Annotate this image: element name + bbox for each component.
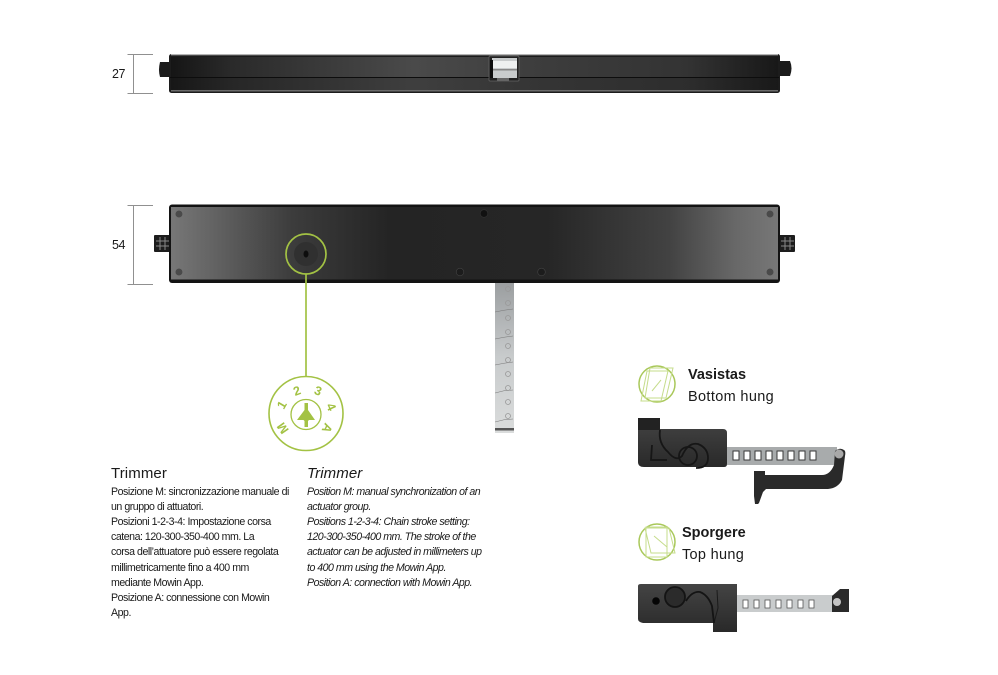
bracket arm	[754, 449, 845, 504]
english body: 120-300-350-400 mm. The stroke of the	[307, 531, 476, 543]
trimmer position dial: 2	[291, 383, 303, 399]
actuator body	[169, 54, 780, 93]
chain bracket	[489, 56, 519, 81]
dimension label 27: 27	[112, 67, 125, 81]
italian body: App.	[111, 607, 131, 619]
italian body: millimetricamente fino a 400 mm	[111, 562, 249, 574]
actuator body	[169, 204, 780, 283]
english heading: Trimmer	[307, 465, 362, 482]
italian body: Posizione M: sincronizzazione manuale di	[111, 486, 289, 498]
italian text block	[111, 465, 289, 619]
label: vasistas: Vasistas	[688, 367, 746, 383]
italian body: corsa dell’attuatore può essere regolata	[111, 546, 278, 558]
icon: bottom hung	[639, 366, 675, 402]
trimmer position dial	[269, 376, 343, 450]
trimmer position dial: A	[319, 421, 335, 435]
vasistas actuator	[638, 418, 845, 504]
english body: Position A: connection with Mowin App.	[307, 577, 472, 589]
dimension label 54: 54	[112, 238, 125, 252]
housing	[638, 418, 727, 467]
italian body: mediante Mowin App.	[111, 577, 203, 589]
trimmer dial	[294, 242, 318, 266]
english body	[307, 486, 482, 589]
trimmer position dial: 4	[323, 401, 339, 413]
trimmer position dial: 3	[312, 383, 324, 399]
italian body: Posizione A: connessione con Mowin	[111, 592, 269, 604]
arm end	[832, 589, 849, 612]
right connector	[779, 235, 795, 252]
top view actuator	[159, 54, 792, 93]
front view actuator	[154, 204, 795, 283]
dimension 27 bracket	[128, 54, 153, 94]
chain strip	[495, 281, 514, 433]
screws	[175, 210, 774, 276]
english body: Position M: manual synchronization of an	[307, 486, 480, 498]
arrow glyph	[297, 403, 315, 427]
left end cap	[159, 62, 170, 77]
dimension 54 bracket	[128, 206, 153, 284]
housing	[638, 584, 737, 632]
italian body	[111, 486, 289, 619]
label: sporgere	[682, 525, 746, 563]
english body: actuator group.	[307, 501, 371, 513]
italian body: un gruppo di attuatori.	[111, 501, 203, 513]
italian body: Posizioni 1-2-3-4: Impostazione corsa	[111, 516, 271, 528]
italian body: catena: 120-300-350-400 mm. La	[111, 531, 254, 543]
label: sporgere: Top hung	[682, 547, 744, 563]
sporgere actuator	[638, 584, 849, 632]
chain	[727, 447, 837, 465]
english body: Positions 1-2-3-4: Chain stroke setting:	[307, 516, 470, 528]
italian heading: Trimmer	[111, 465, 167, 482]
left connector	[154, 235, 170, 252]
trimmer position dial: 1	[274, 398, 290, 412]
english text block	[307, 465, 482, 589]
icon: top hung	[639, 524, 675, 560]
trimmer position dial: M	[274, 420, 292, 436]
label: vasistas: Bottom hung	[688, 389, 774, 405]
english body: actuator can be adjusted in millimeters up	[307, 546, 482, 558]
label: sporgere: Sporgere	[682, 525, 746, 541]
label: vasistas	[688, 367, 774, 405]
right end cap	[779, 61, 792, 76]
chain	[737, 595, 834, 612]
english body: to 400 mm using the Mowin App.	[307, 562, 446, 574]
green callout circle and leader	[286, 234, 326, 376]
